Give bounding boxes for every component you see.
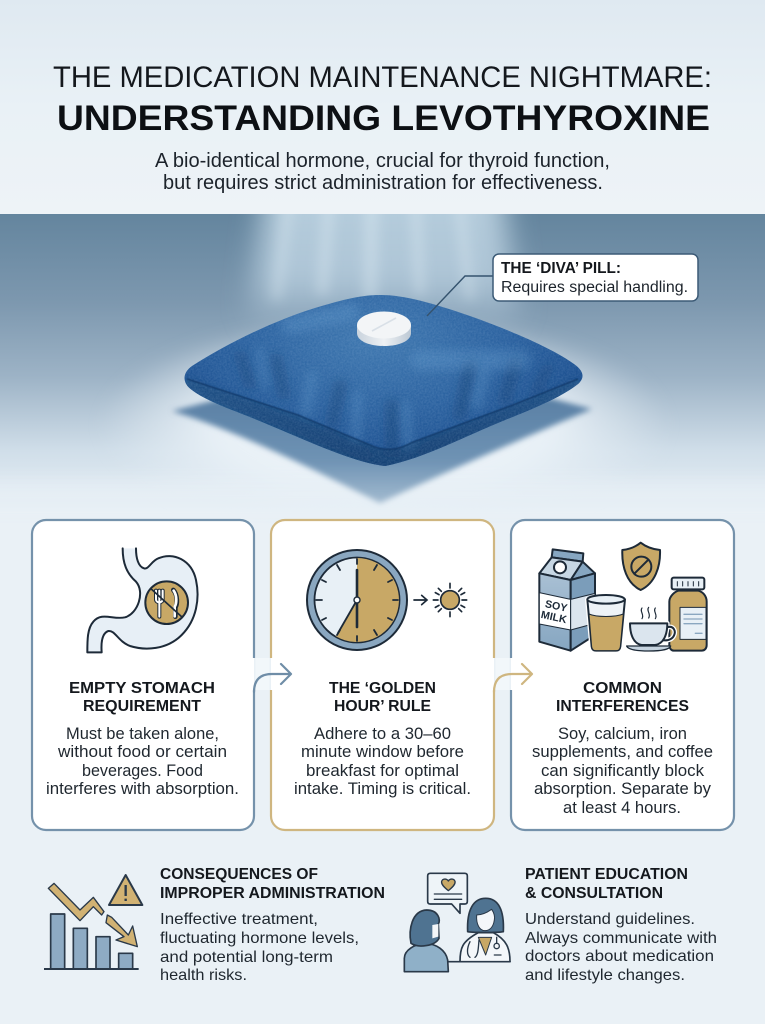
body text: breakfast for optimal [306, 762, 459, 780]
subtitle [155, 150, 610, 194]
section: patient education and consultation [404, 866, 717, 984]
body text [46, 725, 239, 798]
pill [357, 312, 411, 346]
light beam [241, 214, 526, 322]
body text: fluctuating hormone levels, [160, 930, 359, 947]
heading: COMMON [583, 680, 662, 697]
title line 2: UNDERSTANDING LEVOTHYROXINE [57, 99, 710, 138]
body text: Soy, calcium, iron [558, 725, 687, 743]
heading: & CONSULTATION [525, 885, 663, 902]
body text [525, 911, 717, 984]
callout: the diva pill: THE ‘DIVA’ PILL: [501, 260, 621, 277]
title line 1: THE MEDICATION MAINTENANCE NIGHTMARE: [53, 61, 712, 94]
arrow: card one to card two [254, 658, 291, 692]
header background [0, 0, 765, 214]
coffee cup [627, 607, 675, 651]
icon: stomach with crossed-out food [87, 548, 198, 652]
icon: falling chart with warning [44, 875, 142, 969]
body text: absorption. Separate by [534, 780, 712, 798]
supplement bottle [669, 578, 707, 651]
heading: EMPTY STOMACH [69, 680, 215, 697]
soy milk carton [539, 549, 595, 651]
glass of liquid [587, 595, 625, 651]
heading: REQUIREMENT [83, 698, 201, 715]
body text: interferes with absorption. [46, 780, 239, 798]
title [53, 61, 712, 138]
body text: at least 4 hours. [563, 799, 681, 817]
lower page background [0, 500, 765, 1024]
heading: PATIENT EDUCATION [525, 866, 688, 883]
panel: empty stomach requirement [32, 520, 254, 830]
panel: common interferences [511, 520, 734, 830]
arrow: card two to card three [494, 658, 532, 692]
body text: and potential long-term [160, 949, 333, 966]
soy milk carton: SOY [544, 598, 568, 615]
body text: and lifestyle changes. [525, 967, 685, 984]
icon: patient and doctor talking [404, 873, 510, 972]
soy milk carton: MILK [540, 609, 568, 626]
body text: Understand guidelines. [525, 911, 695, 928]
heading [69, 680, 215, 715]
heading [525, 866, 688, 902]
body text [160, 911, 359, 984]
shield with no symbol [622, 543, 660, 590]
section: consequences of improper administration [44, 866, 385, 984]
body text: intake. Timing is critical. [294, 780, 471, 798]
heading [329, 680, 436, 715]
body text [532, 725, 713, 817]
body text: without food or certain [57, 743, 227, 761]
icon: arrow to sun [414, 583, 467, 617]
body text: supplements, and coffee [532, 743, 713, 761]
body text: minute window before [301, 743, 464, 761]
heading: INTERFERENCES [556, 698, 689, 715]
body text: Ineffective treatment, [160, 911, 318, 928]
body text: Always communicate with [525, 930, 717, 947]
body text: can significantly block [541, 762, 705, 780]
heading: IMPROPER ADMINISTRATION [160, 885, 385, 902]
body text [294, 725, 471, 798]
panel: golden hour rule [271, 520, 494, 830]
body text: Adhere to a 30–60 [314, 725, 451, 743]
body text: beverages. Food [82, 762, 203, 780]
pillow [184, 295, 582, 466]
pillow shadow [172, 398, 592, 503]
heading: CONSEQUENCES OF [160, 866, 318, 883]
heading [556, 680, 689, 715]
body text: Must be taken alone, [66, 725, 219, 743]
subtitle: A bio-identical hormone, crucial for thyroid function, [155, 150, 610, 172]
heading: HOUR’ RULE [334, 698, 431, 715]
icon: interfering items [539, 543, 707, 651]
icon: clock [307, 550, 407, 650]
body text: doctors about medication [525, 948, 714, 965]
callout: the diva pill: Requires special handling. [501, 279, 688, 296]
heading [160, 866, 385, 902]
heading: THE ‘GOLDEN [329, 680, 436, 697]
callout: the diva pill [427, 254, 698, 316]
body text: health risks. [160, 967, 247, 984]
subtitle: but requires strict administration for effectiveness. [163, 172, 603, 194]
hero panel: pill on pillow [0, 214, 765, 506]
